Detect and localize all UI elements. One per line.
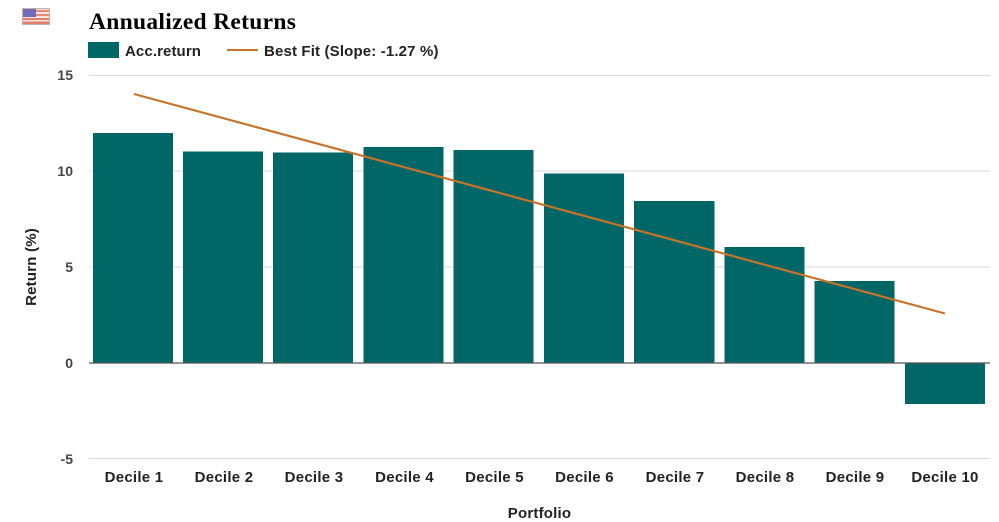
legend: Acc.return bbox=[88, 42, 201, 60]
legend: Acc.return: Acc.return bbox=[125, 43, 201, 60]
x axis labels: Decile 1 bbox=[105, 469, 163, 486]
y axis labels: -5 bbox=[61, 451, 73, 467]
y axis labels: 15 bbox=[57, 67, 73, 83]
legend bbox=[88, 42, 439, 60]
y axis title: Return (%) bbox=[23, 228, 40, 306]
x axis labels: Decile 8 bbox=[736, 469, 794, 486]
best fit line bbox=[134, 94, 945, 314]
x axis labels: Decile 9 bbox=[826, 469, 884, 486]
icon: US flag bbox=[22, 8, 50, 24]
x axis labels: Decile 3 bbox=[285, 469, 343, 486]
x axis labels: Decile 4 bbox=[375, 469, 434, 486]
x axis labels: Decile 5 bbox=[465, 469, 524, 486]
x axis title: Portfolio bbox=[508, 505, 571, 522]
legend: Best Fit: Best Fit (Slope: -1.27 %) bbox=[264, 43, 439, 60]
x axis labels: Decile 6 bbox=[555, 469, 614, 486]
y axis labels: 5 bbox=[65, 259, 73, 275]
zero axis line bbox=[89, 362, 990, 364]
x axis labels: Decile 7 bbox=[646, 469, 704, 486]
bars bbox=[93, 133, 985, 404]
y axis labels: 0 bbox=[65, 355, 73, 371]
y axis labels: 10 bbox=[57, 163, 73, 179]
x axis labels bbox=[105, 469, 979, 486]
y axis labels bbox=[57, 67, 73, 467]
x axis labels: Decile 10 bbox=[911, 469, 979, 486]
title: Annualized Returns bbox=[89, 9, 296, 35]
x axis labels: Decile 2 bbox=[195, 469, 253, 486]
